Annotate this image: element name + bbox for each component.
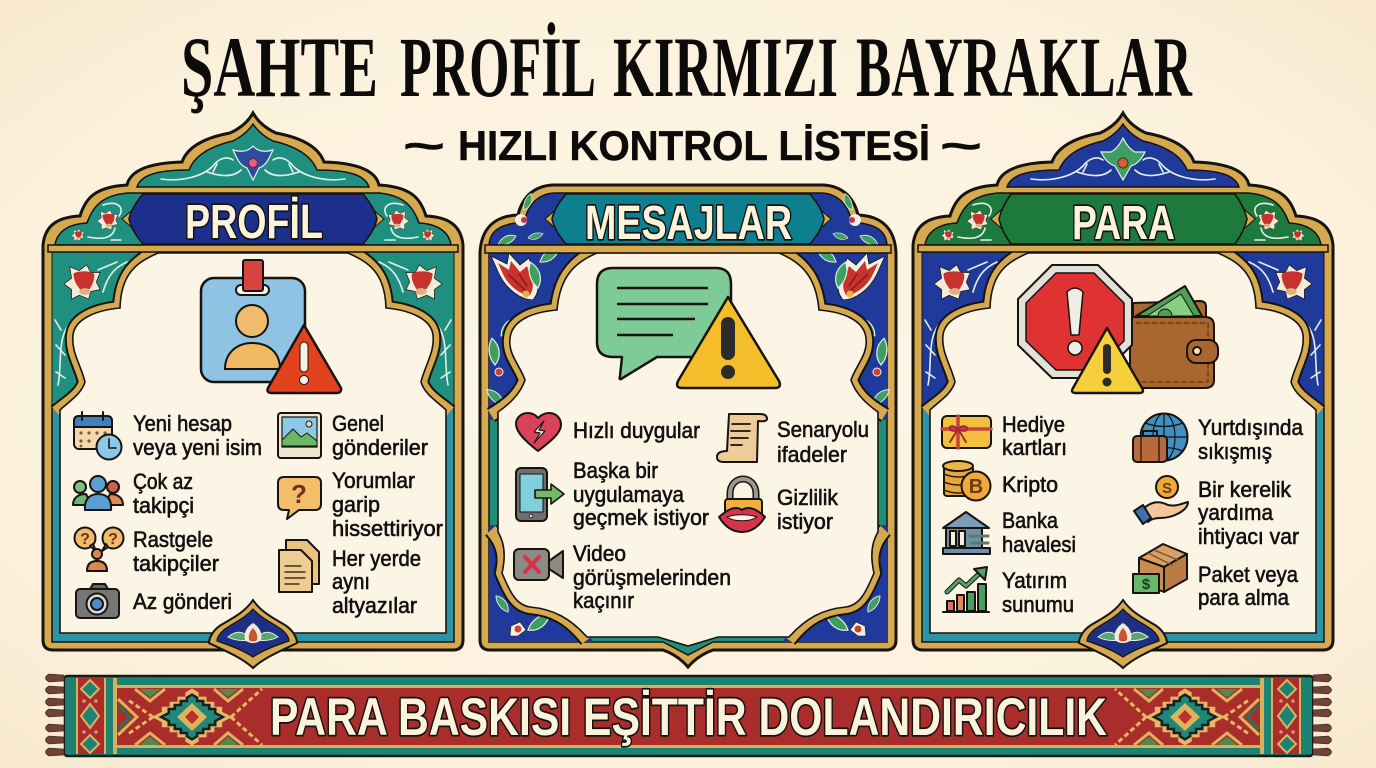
list: mesajlar right — [717, 414, 869, 534]
text: hizli duygular: Hızlı duygular — [573, 418, 700, 443]
icon: hand with coin: S — [1162, 480, 1172, 497]
text: az gonderi: Az gönderi — [133, 589, 232, 614]
text: senaryolu: ifadeler — [777, 442, 847, 467]
list: para right — [1133, 414, 1304, 610]
panel frame: profil — [43, 113, 463, 650]
icon: lock with lips — [719, 479, 765, 532]
text: paket veya: para alma — [1198, 585, 1290, 610]
list: mesajlar left — [514, 413, 731, 613]
text: senaryolu: Senaryolu — [777, 417, 869, 442]
subtitle: ~ — [403, 122, 445, 169]
icon: growth chart — [943, 567, 989, 612]
wallet — [1130, 286, 1218, 388]
icon: stop sign wallet warning — [1018, 265, 1218, 393]
text: cok az — [133, 469, 194, 518]
icon: question people — [74, 528, 124, 571]
title: PROFİL — [400, 19, 596, 115]
icon: question people: ? — [80, 531, 90, 548]
icon: question bubble — [278, 477, 321, 519]
text: gizlilik — [777, 485, 839, 534]
text: bir kerelik: Bir kerelik — [1198, 477, 1292, 502]
icon: broken heart — [516, 413, 561, 451]
text: baska bir — [573, 458, 709, 530]
text: yorumlar: garip — [332, 492, 380, 517]
text: yatirim — [1002, 568, 1074, 617]
text: banka: havalesi — [1002, 532, 1076, 557]
text: paket veya — [1198, 562, 1299, 610]
heading: para: PARA — [1072, 197, 1175, 250]
text: yorumlar: hissettiriyor — [332, 516, 443, 541]
icon: question people: ? — [108, 531, 118, 548]
panel: para — [913, 113, 1333, 668]
list: para left — [942, 412, 1076, 617]
medallion: para — [1079, 600, 1167, 668]
icon: camera — [76, 584, 119, 618]
title: ŞAHTE — [181, 19, 378, 115]
text: bir kerelik: ihtiyacı var — [1198, 524, 1299, 549]
panel frame: para — [913, 113, 1333, 650]
text: yorumlar: Yorumlar — [332, 468, 415, 493]
text: genel: Genel — [332, 411, 384, 436]
icon: id card with warning — [201, 260, 341, 393]
text: her yerde: altyazılar — [332, 593, 417, 618]
panel: mesajlar — [480, 185, 896, 667]
icon: crypto coins — [943, 461, 990, 500]
text: hediye: kartları — [1002, 435, 1067, 460]
text: yatirim: Yatırım — [1002, 568, 1067, 593]
text: gizlilik: istiyor — [777, 509, 833, 534]
text: banka: Banka — [1002, 508, 1059, 533]
icon: package with cash: $ — [1142, 576, 1151, 593]
text: paket veya: Paket veya — [1198, 562, 1299, 587]
text: her yerde: Her yerde — [332, 546, 421, 571]
text: yeni hesap: Yeni hesap — [133, 411, 232, 436]
text: rastgele: Rastgele — [133, 527, 213, 552]
text: yurtdisinda: sıkışmış — [1198, 439, 1272, 464]
icon: question bubble: ? — [291, 479, 307, 509]
text: banka — [1002, 508, 1076, 557]
text: her yerde: aynı — [332, 569, 370, 594]
icon: hand with coin — [1134, 476, 1188, 524]
list: profil right — [278, 411, 443, 618]
text: rastgele: takipçiler — [133, 551, 219, 576]
icon: globe with suitcase — [1133, 414, 1188, 462]
text: her yerde — [332, 546, 421, 618]
icon: package with cash — [1133, 544, 1187, 593]
text: yeni hesap — [133, 411, 262, 460]
text: baska bir: uygulamaya — [573, 482, 685, 507]
text: yorumlar — [332, 468, 443, 541]
text: video — [573, 541, 731, 613]
text: baska bir: geçmek istiyor — [573, 505, 709, 530]
panel: profil — [43, 113, 463, 668]
stop sign — [1018, 265, 1132, 378]
footer text: PARA BASKISI EŞİTTİR DOLANDIRICILIK — [270, 688, 1107, 747]
title: KIRMIZI — [613, 19, 838, 115]
text: hediye — [1002, 412, 1067, 460]
icon: scroll — [717, 414, 767, 462]
icon: crypto coins: B — [969, 476, 983, 498]
heading: mesajlar: MESAJLAR — [585, 197, 792, 250]
text: rastgele — [133, 527, 219, 576]
text: video: kaçınır — [573, 588, 634, 613]
text: kripto: Kripto — [1002, 472, 1058, 497]
icon: people — [73, 476, 123, 510]
text: video: Video — [573, 541, 626, 566]
text: gizlilik: Gizlilik — [777, 485, 839, 510]
text: cok az: takipçi — [133, 493, 194, 518]
icon: phone arrow — [516, 468, 564, 521]
text: yeni hesap: veya yeni isim — [133, 435, 262, 460]
text: yurtdisinda: Yurtdışında — [1198, 415, 1304, 440]
subtitle: HIZLI KONTROL LİSTESİ — [458, 122, 930, 169]
icon: documents — [279, 540, 319, 592]
text: hediye: Hediye — [1002, 412, 1065, 437]
text: genel: gönderiler — [332, 435, 428, 460]
medallion: profil — [209, 600, 297, 668]
text: yurtdisinda — [1198, 415, 1304, 464]
panel frame: mesajlar — [480, 185, 896, 667]
icon: calendar — [74, 412, 122, 460]
title — [181, 19, 1193, 115]
heading: profil: PROFİL — [185, 196, 323, 249]
icon: photo — [278, 413, 321, 458]
list: profil left — [73, 411, 262, 618]
text: yatirim: sunumu — [1002, 592, 1074, 617]
icon: gift card — [942, 416, 991, 448]
subtitle: ~ — [940, 122, 982, 169]
text: bir kerelik: yardıma — [1198, 500, 1274, 525]
icon: chat bubble with warning — [597, 268, 780, 388]
warning triangle — [1072, 328, 1143, 393]
text: baska bir: Başka bir — [573, 458, 658, 483]
text: bir kerelik — [1198, 477, 1299, 549]
footer rug banner — [46, 674, 1332, 756]
text: senaryolu — [777, 417, 869, 467]
icon: bank — [943, 512, 990, 554]
text: cok az: Çok az — [133, 469, 193, 494]
text: genel — [332, 411, 428, 460]
text: video: görüşmelerinden — [573, 565, 731, 590]
icon: video camera crossed — [514, 549, 563, 580]
